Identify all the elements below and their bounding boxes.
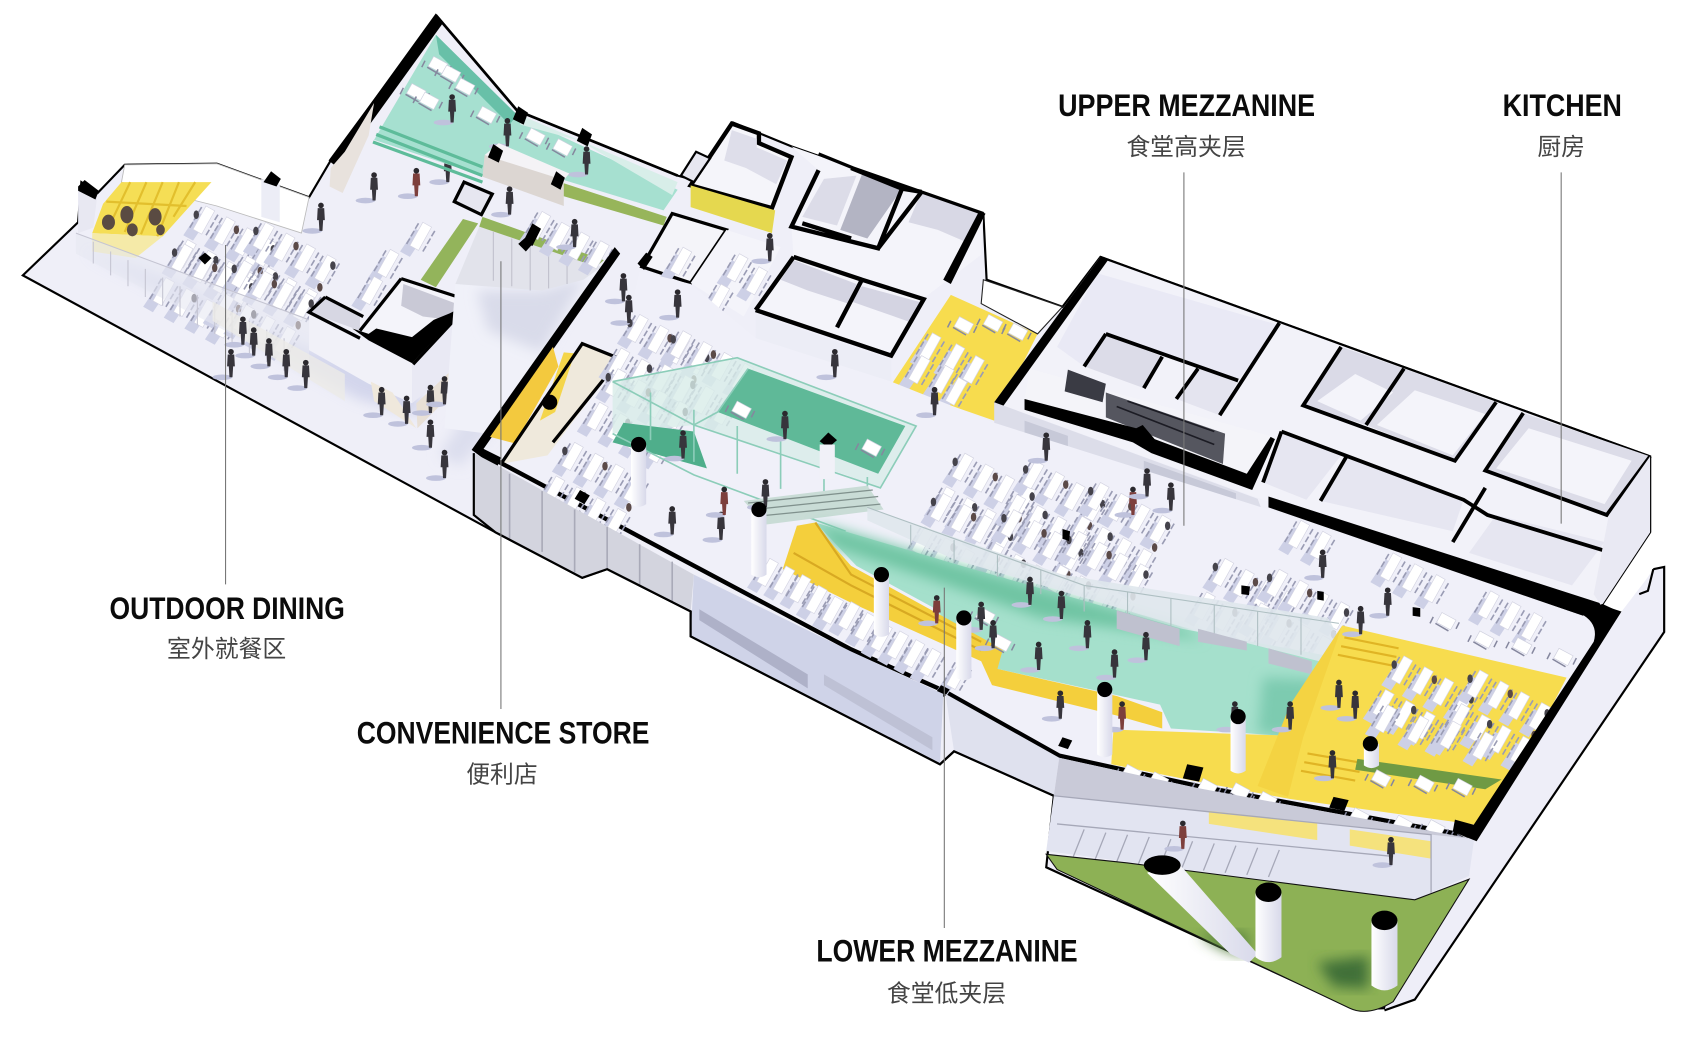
thick kitchen west wall: [994, 257, 1108, 407]
left black wall: [329, 15, 442, 168]
leader: [225, 245, 227, 584]
walking figures: [1164, 821, 1395, 868]
chinese label: 食堂低夹层: [887, 981, 1006, 1008]
chinese label: 室外就餐区: [167, 636, 286, 663]
room B with tables: [638, 214, 781, 319]
panel: entrance walkway: [1046, 796, 1474, 900]
yellow slot: [490, 347, 558, 443]
kitchen slab: [994, 257, 1650, 616]
counter top: [485, 143, 569, 180]
black column on terrace: [198, 253, 211, 265]
store mullions: [493, 232, 567, 291]
service block: [309, 279, 472, 428]
front glass screen: [76, 233, 345, 401]
strip black band: [1466, 604, 1621, 841]
leader: [1183, 172, 1185, 526]
wall pier: [330, 103, 374, 193]
yellow windows: [1209, 811, 1431, 859]
hall floor: [501, 271, 1595, 839]
back line: [1100, 257, 1650, 532]
black column pair: [518, 223, 541, 252]
cluster black walls: [756, 168, 924, 356]
black kitchen band: [1025, 399, 1275, 490]
kitchen partition walls: [1084, 323, 1650, 551]
panel: central service rooms: [638, 124, 1062, 455]
void shadow right: [1258, 678, 1317, 737]
facade west glazed: [474, 453, 694, 611]
panel: convenience store: [421, 182, 615, 434]
block front wall: [756, 314, 891, 382]
terrace round tables: [400, 56, 590, 190]
english label: UPPER MEZZANINE: [1058, 88, 1315, 123]
corner wall pier: [78, 186, 98, 233]
panel: teal raised terrace: [329, 15, 678, 225]
mid room: [802, 176, 857, 225]
green strip: [421, 219, 478, 287]
corridor shadow: [439, 276, 585, 466]
lawn shadow two: [1198, 932, 1247, 956]
wall cap: [78, 180, 99, 199]
yellow dining bay: [891, 280, 1062, 455]
panel: main canteen floor: [472, 247, 1595, 842]
leader: [500, 261, 502, 709]
void deep shadow: [815, 523, 1203, 640]
cluster outer back edge: [819, 154, 983, 214]
callout: convenience store: [357, 261, 649, 789]
leader: [1560, 172, 1562, 524]
green strip two: [479, 217, 604, 267]
terrace floor: [374, 35, 678, 210]
callout: kitchen: [1503, 88, 1622, 524]
front edge tables: [747, 558, 1015, 696]
chinese label: 食堂高夹层: [1126, 134, 1246, 161]
people on dining terrace: [213, 154, 531, 481]
kitchen open room shade: [1057, 273, 1279, 381]
columns in main hall: [542, 395, 1379, 774]
panel: lawn with columns: [1046, 567, 1664, 1011]
facade mezzanine: [945, 694, 1059, 796]
upper glazing: [1054, 758, 1474, 867]
kitchen equipment: [1025, 369, 1274, 477]
green planter strip: [564, 183, 667, 225]
right edge strip: [1384, 567, 1664, 1010]
strip outer line: [1384, 567, 1664, 1010]
facade recess windows: [699, 609, 808, 688]
big right room walls: [909, 192, 983, 244]
panel: kitchen: [994, 257, 1650, 616]
side room outline: [501, 344, 620, 464]
hall front edge line: [499, 462, 1474, 837]
back line: [436, 15, 678, 176]
small dark rooms: [840, 175, 902, 239]
hall black pier caps: [575, 490, 1474, 838]
yellow wall panel: [691, 185, 775, 233]
panel: outdoor dining wing: [76, 154, 585, 481]
display screens: [1025, 421, 1236, 510]
people in main hall: [605, 273, 1392, 781]
yellow stepped ramp: [783, 523, 1162, 729]
end cap: [1594, 456, 1650, 606]
callout: upper mezzanine: [1058, 88, 1315, 526]
upper void glass enclosure: [613, 358, 916, 531]
lower room walls: [781, 260, 922, 323]
callout: lower mezzanine: [816, 588, 1078, 1008]
black hall west wall: [472, 247, 620, 468]
glazed corridor: [1046, 796, 1474, 900]
diagonal column: [1144, 855, 1258, 963]
english label: OUTDOOR DINING: [110, 591, 345, 626]
terrace steps: [373, 127, 482, 182]
small black-edged room: [454, 182, 492, 215]
store void floor: [445, 227, 615, 434]
ground shadows: [85, 252, 425, 417]
staircase bridge: [744, 486, 884, 525]
black rear band: [1268, 497, 1602, 616]
columns on terrace: [488, 106, 592, 190]
room block A: [691, 124, 791, 208]
thick east wall: [943, 211, 986, 284]
yellow stepped seating: [92, 182, 211, 258]
panel: front facade: [474, 453, 1474, 867]
room A back wall: [724, 130, 787, 184]
callout: outdoor dining: [110, 245, 345, 663]
inner wall: [436, 35, 517, 125]
table clusters: [533, 314, 1576, 670]
store glass: [455, 227, 602, 291]
yellow dining area: [1111, 626, 1567, 842]
chinese label: 厨房: [1537, 134, 1585, 161]
chinese label: 便利店: [466, 762, 538, 789]
pale wall face: [517, 114, 678, 195]
lawn: [1046, 854, 1469, 1011]
facade recess windows two: [824, 674, 932, 750]
side room yellow fold: [540, 352, 575, 421]
back glazed wall: [121, 164, 309, 233]
facade glazing mullions: [510, 474, 672, 603]
lawn shadow: [1317, 956, 1368, 989]
vertical column two: [1371, 911, 1397, 990]
facade base edge: [474, 453, 1054, 796]
kitchen serving counter: [994, 402, 1271, 533]
english label: CONVENIENCE STORE: [357, 716, 649, 751]
pier beside terrace: [261, 179, 280, 222]
english label: LOWER MEZZANINE: [816, 934, 1078, 969]
glass ramp balustrade: [867, 507, 1339, 674]
storage rooms: [1084, 334, 1650, 585]
leader: [943, 588, 945, 928]
vertical column one: [1255, 882, 1281, 962]
lower void teal floor: [815, 523, 1328, 737]
facade lower: [691, 575, 943, 764]
outdoor tables: [143, 206, 435, 361]
recessed store floor: [477, 276, 585, 352]
handrail lines: [1054, 796, 1431, 900]
english label: KITCHEN: [1503, 88, 1622, 123]
side room: [501, 344, 620, 464]
beige counter block: [482, 155, 564, 206]
service counter tables: [491, 186, 613, 275]
pier cap: [263, 171, 281, 186]
room wing sliver: [681, 152, 710, 182]
room cluster: [756, 146, 986, 382]
